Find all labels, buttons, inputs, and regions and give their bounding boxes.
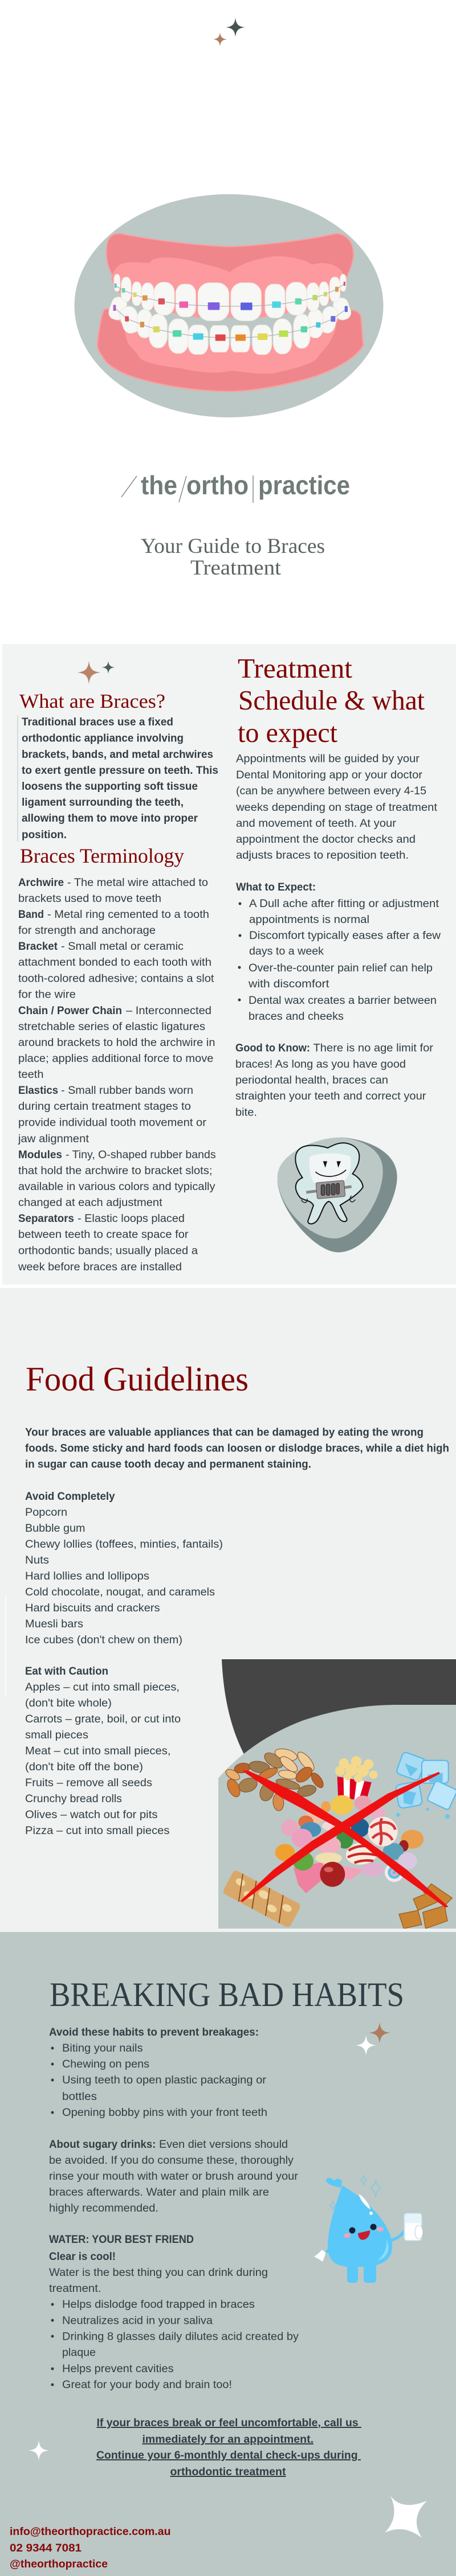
text block: appointments: weeks depending on stage of treatment [235,802,438,814]
list: eat with caution: Crunchy bread rolls [25,1793,122,1805]
list: avoid completely: Hard biscuits and crackers [25,1602,160,1614]
heading: Treatment Schedule: to expect [238,717,337,748]
text block: food intro: Your braces are valuable appliances that can be damaged by eating the wrong [25,1427,424,1438]
text block: terminology: provide individual tooth movement or [18,1117,207,1129]
heading: Treatment Schedule [238,653,425,748]
list: avoid completely: Chewy lollies (toffees, minties, fantails) [25,1539,223,1550]
text block: good to know [235,1042,434,1118]
callout: braces break notice: orthodontic treatment [170,2466,286,2478]
text block: what are braces [17,715,218,842]
contact details: @theorthopractice [10,2558,108,2570]
text block: terminology: Archwire [18,877,64,889]
list: avoid completely: Avoid Completely [25,1491,115,1503]
text block: appointments: and movement of teeth. At your [236,818,397,830]
text block: sugary drinks: Even diet versions should [159,2139,288,2151]
text block: terminology: Elastics [18,1085,58,1097]
text block: good to know: There is no age limit for [314,1042,434,1055]
list: habits to avoid: Using teeth to open plastic packaging or [62,2074,267,2086]
callout: braces break notice: Continue your 6-monthly dental check-ups during [96,2450,361,2462]
text block: terminology [18,877,216,1273]
text block: water your best friend [49,2234,299,2391]
text block: terminology: that hold the archwire to bracket slots; [18,1165,212,1177]
heading: Braces Terminology: Braces Terminology [20,844,184,867]
text block: what are braces: orthodontic appliance involving [22,732,184,745]
text block: terminology: Separators [18,1213,74,1225]
heading: Treatment Schedule: Treatment [238,653,352,684]
list: habits to avoid [49,2027,267,2119]
callout: braces break notice: If your braces break or feel uncomfortable, call us [97,2417,361,2429]
text block: what are braces: to exert gentle pressure on teeth. This [22,765,218,777]
list: what to expect: Discomfort typically eases after a few [249,930,441,942]
list: habits to avoid: Opening bobby pins with your front teeth [62,2107,267,2119]
text block: terminology: - Metal ring cemented to a tooth [47,909,209,921]
list: eat with caution: Fruits – remove all seeds [25,1777,152,1789]
heading: Breaking Bad Habits: BREAKING BAD HABITS [50,1976,404,2013]
text block: good to know: braces! As long as you have good [235,1059,406,1070]
panel: cover [74,18,383,580]
list: avoid completely: Ice cubes (don't chew on them) [25,1634,182,1646]
text block: what are braces: loosens the supporting soft tissue [22,781,198,793]
text block: terminology: place; applies additional force to move [18,1053,213,1065]
text block: what are braces: Traditional braces use a fixed [22,716,173,728]
text block: food intro: in sugar can cause tooth decay and permanent staining. [25,1459,311,1470]
list: avoid completely: Bubble gum [25,1523,85,1535]
text block: water your best friend: WATER: YOUR BEST FRIEND [49,2234,194,2246]
text block: food intro: foods. Some sticky and hard foods can loosen or dislodge braces, while a diet high [25,1443,449,1454]
contact details [10,2526,171,2570]
text block: appointments [235,753,438,862]
text block: appointments: adjusts braces to reposition teeth. [236,850,409,862]
heading: Treatment Schedule: Schedule & what [238,684,425,716]
list: eat with caution: Apples – cut into small pieces, [25,1681,180,1693]
logo: the ortho practice: the [141,470,177,500]
text block: sugary drinks: be avoided. If you do consume these, thoroughly [49,2155,294,2167]
list: eat with caution: Olives – watch out for pits [25,1809,157,1821]
text block: terminology: Modules [18,1149,62,1161]
list: habits to avoid: bottles [62,2091,97,2103]
subtitle [141,535,325,580]
text block: water your best friend: Neutralizes acid in your saliva [62,2315,213,2327]
text block: terminology: for the wire [18,988,76,1001]
text block: terminology: jaw alignment [18,1133,89,1145]
icon: candy pile [275,1795,424,1893]
text block: water your best friend: plaque [62,2347,96,2358]
text block: terminology: – Interconnected [126,1005,211,1017]
list: eat with caution: small pieces [25,1729,88,1741]
icon: white sparkle left [28,2440,49,2461]
text block: terminology: - Elastic loops placed [78,1213,185,1225]
contact details: info@theorthopractice.com.au [10,2526,171,2538]
text block: what are braces: allowing them to move into proper [22,813,198,825]
text block: terminology: available in various colors and typically [18,1181,215,1193]
text block: appointments: Appointments will be guided by your [236,753,420,765]
list: what to expect: braces and cheeks [249,1011,344,1023]
list: eat with caution: Pizza – cut into small pieces [25,1825,170,1837]
text block: what are braces: ligament surrounding the teeth, [22,797,184,809]
logo: the ortho practice [121,470,350,503]
text block: terminology: changed at each adjustment [18,1197,162,1209]
icon: ice cubes [395,1751,456,1810]
text block: terminology: for strength and anchorage [18,925,156,937]
contact details: 02 9344 7081 [10,2542,82,2554]
subtitle: Treatment [190,556,282,580]
text block: what are braces: position. [22,829,67,841]
subtitle: Your Guide to Braces [141,535,325,558]
illustration: teeth with braces [74,194,383,417]
illustration: foods to avoid crossed out [218,1659,456,1929]
icon: section sparkles [78,661,115,684]
list: what to expect: Over-the-counter pain relief can help [249,962,433,974]
callout: braces break notice [96,2417,361,2478]
list: habits to avoid: Biting your nails [62,2042,142,2054]
list: avoid completely: Hard lollies and lollipops [25,1570,149,1582]
text block: food intro [25,1427,449,1470]
text block: good to know: straighten your teeth and correct your [235,1090,426,1102]
text block: appointments: (can be anywhere between every 4-15 [236,785,426,797]
list: what to expect: A Dull ache after fitting or adjustment [249,898,439,910]
text block: terminology: Chain / Power Chain [18,1005,122,1017]
text block: good to know: periodontal health, braces can [235,1074,388,1086]
text block: terminology: Bracket [18,941,58,953]
text block: terminology: between teeth to create space for [18,1229,189,1241]
text block: water your best friend: Helps prevent cavities [62,2363,174,2375]
panel: food guidelines [0,1288,456,1932]
text block: sugary drinks: About sugary drinks: [49,2139,156,2151]
text block: terminology: during certain treatment stages to [18,1101,191,1113]
text block: water your best friend: treatment. [49,2283,101,2295]
list: eat with caution: Carrots – grate, boil, or cut into [25,1713,181,1725]
text block: water your best friend: Helps dislodge food trapped in braces [62,2299,255,2311]
list: eat with caution: (don't bite whole) [25,1697,112,1709]
list: eat with caution: (don't bite off the bone) [25,1761,143,1773]
icon: caramels [399,1884,452,1929]
text block: water your best friend: Great for your body and brain too! [62,2379,232,2391]
list: avoid completely [25,1491,223,1646]
icon: sparkles [356,2022,390,2056]
text block: terminology: - Small rubber bands worn [61,1085,193,1097]
text block: terminology: week before braces are installed [18,1261,182,1273]
text block: water your best friend: Water is the best thing you can drink during [49,2267,268,2279]
logo: the ortho practice: ortho [186,470,249,500]
icon: top sparkles [213,18,245,47]
icon: smiling tooth with brace [278,1137,397,1252]
logo: the ortho practice: practice [258,470,350,500]
list: habits to avoid: Avoid these habits to prevent breakages: [49,2027,259,2038]
text block: appointments: appointment the doctor checks and [236,834,416,846]
text block: terminology: teeth [18,1069,43,1081]
text block: good to know: Good to Know: [235,1042,310,1055]
heading: What are Braces: What are Braces? [19,690,165,712]
text block: terminology: - Small metal or ceramic [61,941,184,953]
list: what to expect: appointments is normal [249,914,369,926]
list: what to expect: with discomfort [248,978,329,990]
list: eat with caution [25,1666,181,1837]
callout: braces break notice: immediately for an appointment. [142,2434,314,2446]
list: avoid completely: Muesli bars [25,1618,83,1630]
list: eat with caution: Meat – cut into small pieces, [25,1745,171,1757]
text block: terminology: Band [18,909,44,921]
list: what to expect: days to a week [249,945,324,958]
icon: popcorn [335,1756,377,1799]
text block: sugary drinks [49,2139,299,2214]
list: avoid completely: Nuts [25,1554,49,1566]
text block: terminology: orthodontic bands; usually placed a [18,1245,198,1257]
list: what to expect: What to Expect: [236,881,316,893]
list: what to expect [236,881,441,1023]
list: eat with caution: Eat with Caution [25,1666,108,1677]
illustration: water drop character [314,2175,423,2283]
text block: sugary drinks: braces afterwards. Water and plain milk are [49,2187,269,2198]
text block: what are braces: brackets, bands, and metal archwires [22,749,213,761]
text block: terminology: - Tiny, O-shaped rubber bands [66,1149,216,1161]
text block: terminology: stretchable series of elastic ligatures [18,1021,205,1033]
list: avoid completely: Cold chocolate, nougat, and caramels [25,1586,215,1598]
icon: red cross [241,1770,449,1908]
text block: terminology: brackets used to move teeth [18,893,161,905]
list: habits to avoid: Chewing on pens [62,2058,149,2070]
panel: breaking bad habits [0,1932,456,2576]
text block: good to know: bite. [235,1107,257,1118]
text block: terminology: around brackets to hold the archwire in [18,1037,215,1049]
icon: large white sparkle [385,2496,427,2538]
panel: braces information [2,644,456,1285]
heading: Food Guidelines: Food Guidelines [26,1360,249,1398]
text block: sugary drinks: rinse your mouth with water or brush around your [49,2171,299,2183]
text block: terminology: attachment bonded to each tooth with [18,957,211,969]
text block: terminology: tooth-colored adhesive; contains a slot [18,973,214,985]
list: avoid completely: Popcorn [25,1507,67,1519]
text block: terminology: - The metal wire attached to [67,877,208,889]
list: what to expect: Dental wax creates a barrier between [249,995,437,1007]
text block: appointments: Dental Monitoring app or your doctor [236,769,423,781]
text block: water your best friend: Drinking 8 glasses daily dilutes acid created by [62,2331,299,2343]
icon: muesli bar [222,1869,302,1929]
text block: water your best friend: Clear is cool! [49,2251,116,2263]
icon: nuts [224,1746,325,1811]
text block: sugary drinks: highly recommended. [49,2202,158,2214]
